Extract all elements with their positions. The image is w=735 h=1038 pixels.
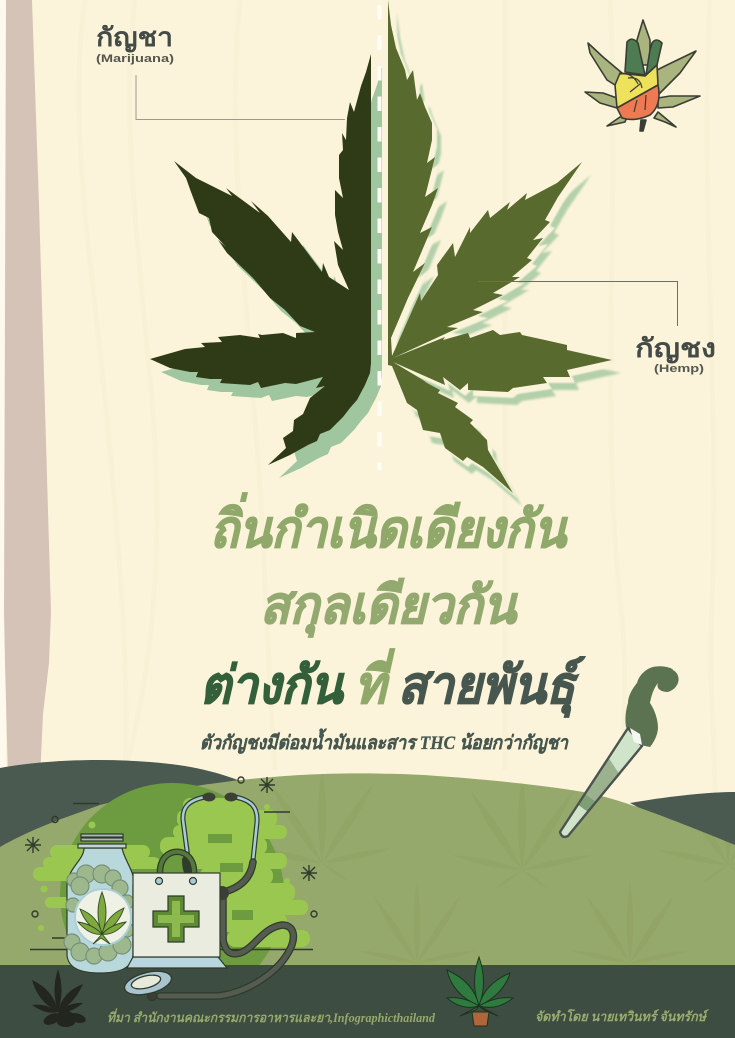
faint leaves on hill xyxy=(522,784,523,785)
label: marijuana xyxy=(96,23,174,65)
footer band xyxy=(0,965,735,1038)
icon: jar of buds xyxy=(64,834,134,973)
background: faint vertical stripes xyxy=(79,0,715,800)
label: hemp: กัญชง xyxy=(635,334,716,364)
subtitle: ตัวกัญชงมีต่อมน้ำมันและสาร THC น้อยกว่ากัญชา xyxy=(200,728,569,754)
icon: peace hand on leaf xyxy=(585,20,700,131)
front green hill xyxy=(0,773,735,1038)
title line 2: สกุลเดียวกัน xyxy=(260,578,518,638)
background: pale left margin xyxy=(0,0,6,780)
icon: rolled joint with smoke xyxy=(560,666,679,837)
icon: potted leaf xyxy=(447,957,513,1026)
decorative sparks and rings xyxy=(25,777,317,950)
leader line: marijuana xyxy=(136,75,345,120)
title line 3: ต่างกัน ที่ สายพันธุ์ xyxy=(200,648,586,718)
leaf: hemp half xyxy=(388,0,621,506)
label: hemp: (Hemp) xyxy=(654,363,704,375)
green circle backdrop xyxy=(60,783,284,1007)
label: hemp xyxy=(635,334,716,375)
icon: medical bag xyxy=(127,852,227,968)
icon: label leaf xyxy=(78,892,126,944)
leaf: marijuana half xyxy=(150,54,382,478)
title line 1: ถิ่นกำเนิดเดียงกัน xyxy=(210,492,568,559)
darker dashes in pattern xyxy=(208,834,253,920)
pink left bar xyxy=(4,0,51,780)
icon: medical cross xyxy=(153,896,199,942)
leader line: hemp xyxy=(478,282,678,326)
back dark hills xyxy=(0,760,735,880)
icon: black leaf with pills xyxy=(32,969,87,1027)
footer source text: ที่มา สำนักงานคณะกรรมการอาหารและยา,Infographicthailand xyxy=(107,1008,435,1025)
footer credit text: จัดทำโดย นายเทวินทร์ จันทรักษ์ xyxy=(535,1008,709,1024)
icon: stethoscope chest piece xyxy=(122,967,174,1000)
label: marijuana: กัญชา xyxy=(96,23,173,53)
dashed centre line xyxy=(378,5,382,470)
lime brush pattern xyxy=(33,798,310,947)
icon: stethoscope xyxy=(160,792,293,996)
label: marijuana: (Marijuana) xyxy=(96,53,174,65)
